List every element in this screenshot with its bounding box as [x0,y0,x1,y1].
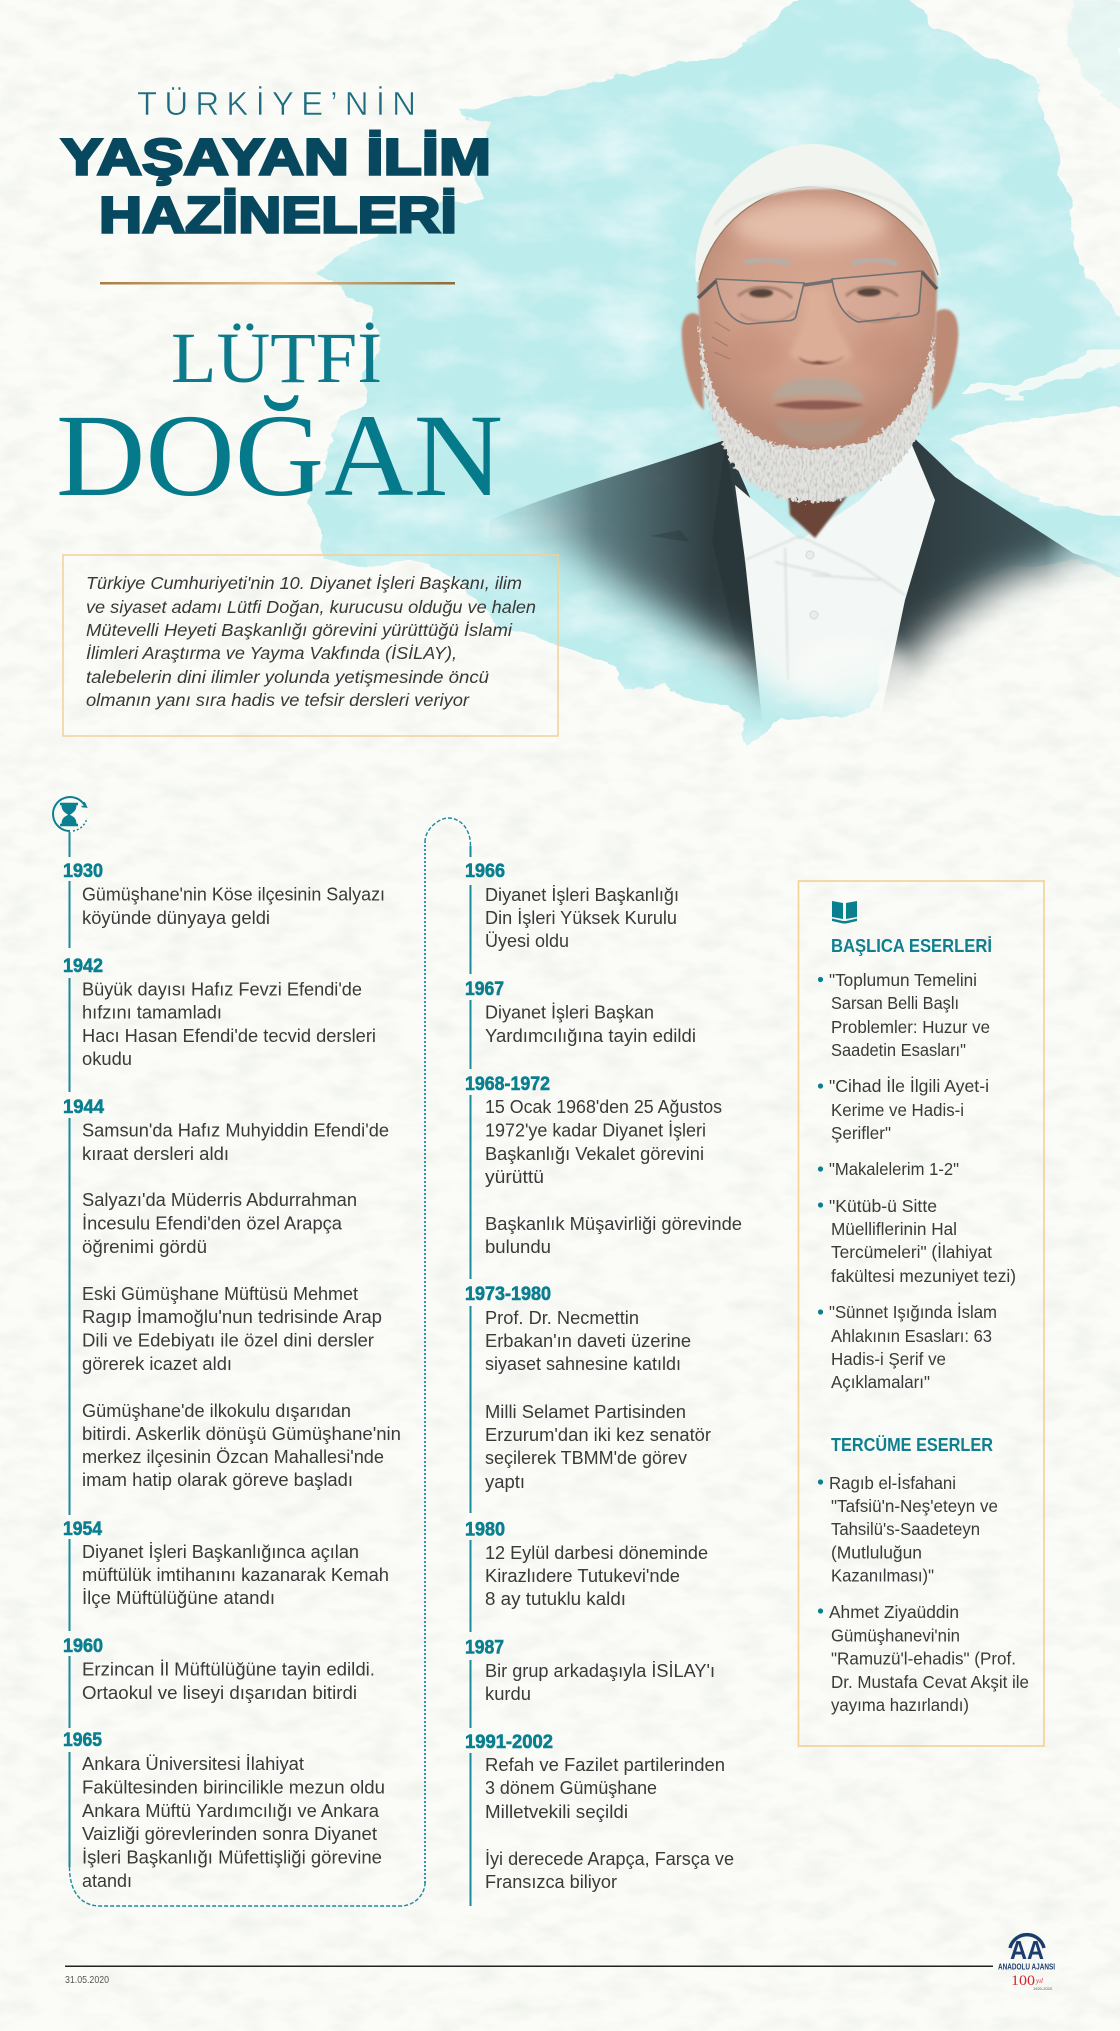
footer rule [65,1966,993,1967]
translated works list: Ragıb el-İsfahani [829,1473,956,1493]
event 1965: Fakültesinden birincilikle mezun oldu [82,1778,385,1798]
event 1967: 1967 [465,978,504,1000]
translated works list: yayıma hazırlandı) [831,1695,969,1715]
event 1965 [63,1729,385,1891]
event 1968-1972: bulundu [485,1237,551,1257]
date: 31.05.2020 [65,1974,109,1986]
main works list: Hadis-i Şerif ve [831,1349,946,1369]
event 1973-1980 [465,1283,711,1492]
event 1954: Diyanet İşleri Başkanlığınca açılan [82,1542,359,1562]
event 1973-1980: Prof. Dr. Necmettin [485,1308,639,1328]
translated works list: (Mutluluğun [831,1542,922,1562]
main works list: "Sünnet Işığında İslam [829,1302,997,1322]
eyebrows [745,259,897,265]
event 1944: görerek icazet aldı [82,1354,232,1374]
white watercolor cloud at portrait edge [790,636,910,704]
intro panel: olmanın yanı sıra hadis ve tefsir dersleri veriyor [86,690,470,710]
event 1966: Din İşleri Yüksek Kurulu [485,908,677,928]
logo: Anadolu Ajansı [998,1935,1055,1991]
intro panel: ve siyaset adamı Lütfi Doğan, kurucusu olduğu ve halen [86,597,536,617]
eyes [712,287,900,359]
event 1942: Büyük dayısı Hafız Fevzi Efendi'de [82,980,362,1000]
translated works list: Tahsilü's-Saadeteyn [831,1519,980,1539]
event 1942: 1942 [63,955,103,977]
event 1944: Gümüşhane'de ilkokulu dışarıdan [82,1401,351,1421]
event 1954: müftülük imtihanını kazanarak Kemah [82,1565,389,1585]
beard [699,320,934,502]
portrait of Lütfi Doğan [470,144,1120,720]
intro panel: Türkiye Cumhuriyeti'nin 10. Diyanet İşleri Başkanı, ilim [86,573,522,593]
main works list: "Makalelerim 1-2" [829,1159,959,1179]
event 1965: Vaizliği görevlerinden sonra Diyanet [82,1824,377,1844]
gold divider [100,282,455,284]
event 1991-2002: 3 dönem Gümüşhane [485,1778,657,1798]
event 1991-2002: İyi derecede Arapça, Farsça ve [485,1849,734,1869]
main works list: Problemler: Huzur ve [831,1017,990,1037]
translated works list: Kazanılması)" [831,1566,934,1586]
translated works list: Gümüşhanevi'nin [831,1626,960,1646]
event 1967 [465,978,696,1046]
event 1944: Ragıp İmamoğlu'nun tedrisinde Arap [82,1307,382,1327]
event 1954: İlçe Müftülüğüne atandı [82,1588,275,1608]
logo: Anadolu Ajansı: ANADOLU AJANSI [998,1962,1055,1972]
event 1966: Üyesi oldu [485,931,569,951]
event 1973-1980: Milli Selamet Partisinden [485,1402,686,1422]
face [696,188,938,450]
event 1991-2002: Refah ve Fazilet partilerinden [485,1755,725,1775]
logo: Anadolu Ajansı: 1920-2020 [1033,1986,1053,1991]
event 1987: 1987 [465,1636,504,1658]
collar folds [745,536,905,680]
chin stubble [779,420,861,444]
event 1991-2002: Fransızca biliyor [485,1872,617,1892]
main works list: Sarsan Belli Başlı [831,993,959,1013]
event 1960: Erzincan İl Müftülüğüne tayin edildi. [82,1660,375,1680]
event 1944: Eski Gümüşhane Müftüsü Mehmet [82,1284,358,1304]
event 1942: hıfzını tamamladı [82,1003,222,1023]
translated works list: Dr. Mustafa Cevat Akşit ile [831,1672,1029,1692]
event 1944: merkez ilçesinin Özcan Mahallesi'nde [82,1447,384,1467]
main works list: fakültesi mezuniyet tezi) [831,1266,1016,1286]
event 1987 [465,1636,715,1704]
event 1968-1972: yürüttü [485,1167,544,1187]
event 1954 [63,1518,389,1608]
event 1960: Ortaokul ve liseyi dışarıdan bitirdi [82,1683,357,1703]
event 1965: Ankara Üniversitesi İlahiyat [82,1754,304,1774]
event 1965: Ankara Müftü Yardımcılığı ve Ankara [82,1801,380,1821]
event 1965: atandı [82,1871,132,1891]
event 1944: öğrenimi gördü [82,1237,207,1257]
logo: Anadolu Ajansı: AA [1010,1935,1044,1965]
event 1930: Gümüşhane'nin Köse ilçesinin Salyazı [82,884,385,904]
taqiyah cap [695,144,941,282]
event 1980 [465,1518,708,1609]
main works list [818,970,1016,1392]
intro panel: talebelerin dini ilimler yolunda yetişmesinde öncü [86,667,489,687]
main works list: Şerifler" [831,1123,891,1143]
event 1942: okudu [82,1049,132,1069]
heading: Türkiye'nin: TÜRKİYE’NİN [137,85,416,122]
event 1973-1980: Erzurum'dan iki kez senatör [485,1425,711,1445]
icon: open book [832,901,857,924]
event 1991-2002: Milletvekili seçildi [485,1802,628,1822]
event 1944: Samsun'da Hafız Muhyiddin Efendi'de [82,1120,389,1140]
heading: translated works: TERCÜME ESERLER [831,1435,993,1455]
logo: Anadolu Ajansı: 100 [1011,1973,1035,1989]
timeline right column [465,860,742,1892]
timeline left column [63,860,401,1891]
event 1960: 1960 [63,1635,103,1657]
logo: Anadolu Ajansı: yıl [1035,1977,1043,1985]
event 1973-1980: siyaset sahnesine katıldı [485,1354,681,1374]
intro panel: Mütevelli Heyeti Başkanlığı görevini yürüttüğü İslami [86,620,513,640]
event 1980: 1980 [465,1518,505,1540]
event 1987: Bir grup arkadaşıyla İSİLAY'ı [485,1661,715,1681]
event 1973-1980: yaptı [485,1472,525,1492]
event 1973-1980: 1973-1980 [465,1283,551,1305]
event 1965: 1965 [63,1729,102,1751]
event 1980: 12 Eylül darbesi döneminde [485,1543,708,1563]
event 1944: Salyazı'da Müderris Abdurrahman [82,1190,357,1210]
event 1930: köyünde dünyaya geldi [82,908,270,928]
translated works list: "Ramuzü'l-ehadis" (Prof. [831,1648,1016,1668]
icon: hourglass [53,797,87,831]
event 1930 [63,860,385,928]
neck shadow [788,490,848,538]
event 1942 [63,955,376,1069]
jacket lapel shadow [652,530,689,542]
event 1944: 1944 [63,1096,104,1118]
main works list: Kerime ve Hadis-i [831,1100,964,1120]
event 1968-1972: 1972'ye kadar Diyanet İşleri [485,1120,706,1140]
main works list: Açıklamaları" [831,1372,930,1392]
event 1966: 1966 [465,860,505,882]
event 1967: Yardımcılığına tayin edildi [485,1026,696,1046]
main works list: Müelliflerinin Hal [831,1219,957,1239]
name: Lütfi: LÜTFİ [171,318,382,398]
forehead highlight [732,201,888,249]
jacket right [884,440,1113,706]
event 1980: 8 ay tutuklu kaldı [485,1589,626,1609]
event 1968-1972: Başkanlığı Vekalet görevini [485,1144,704,1164]
heading: Hazineleri: HAZİNELERİ [99,187,457,244]
main works list: Saadetin Esasları" [831,1040,966,1060]
main works list: "Kütüb-ü Sitte [829,1196,937,1216]
moustache [772,378,866,402]
main works list: Ahlakının Esasları: 63 [831,1326,992,1346]
event 1944: Dili ve Edebiyatı ile özel dini dersler [82,1330,374,1350]
event 1944 [63,1096,401,1490]
main works list: "Cihad İle İlgili Ayet-i [829,1076,989,1096]
event 1966 [465,860,679,951]
event 1968-1972 [465,1073,742,1257]
lips [774,400,864,410]
event 1968-1972: 1968-1972 [465,1073,550,1095]
timeline connector lines [70,818,470,1906]
cheek shadow [734,331,904,368]
event 1966: Diyanet İşleri Başkanlığı [485,885,679,905]
glasses [698,271,937,324]
event 1991-2002 [465,1731,734,1892]
watercolor blob [314,0,1120,745]
event 1954: 1954 [63,1518,102,1540]
heading: main works: BAŞLICA ESERLERİ [831,936,992,956]
event 1968-1972: Başkanlık Müşavirliği görevinde [485,1214,742,1234]
event 1944: kıraat dersleri aldı [82,1144,229,1164]
panel: works [798,881,1044,1746]
event 1930: 1930 [63,860,103,882]
ears [682,309,958,410]
event 1967: Diyanet İşleri Başkan [485,1002,654,1022]
shirt [735,445,935,720]
translated works list: Ahmet Ziyaüddin [829,1602,959,1622]
jacket left [491,440,761,714]
main works list: "Toplumun Temelini [829,970,977,990]
translated works list [818,1473,1029,1715]
event 1944: bitirdi. Askerlik dönüşü Gümüşhane'nin [82,1424,401,1444]
event 1991-2002: 1991-2002 [465,1731,553,1753]
intro panel [63,555,558,736]
main works list: Tercümeleri" (İlahiyat [831,1242,992,1262]
event 1973-1980: seçilerek TBMM'de görev [485,1448,687,1468]
event 1960 [63,1635,375,1703]
event 1968-1972: 15 Ocak 1968'den 25 Ağustos [485,1097,722,1117]
name: Doğan: DOĞAN [56,390,503,521]
event 1980: Kirazlıdere Tutukevi'nde [485,1566,680,1586]
event 1987: kurdu [485,1684,531,1704]
shirt buttons [806,551,818,619]
event 1942: Hacı Hasan Efendi'de tecvid dersleri [82,1026,376,1046]
intro panel: İlimleri Araştırma ve Yayma Vakfında (İSİLAY), [86,643,457,663]
nose [791,317,850,366]
event 1965: İşleri Başkanlığı Müfettişliği görevine [82,1848,382,1868]
translated works list: "Tafsiü'n-Neş'eteyn ve [831,1496,998,1516]
event 1973-1980: Erbakan'ın daveti üzerine [485,1331,691,1351]
event 1944: imam hatip olarak göreve başladı [82,1470,353,1490]
event 1944: İncesulu Efendi'den özel Arapça [82,1214,343,1234]
heading: Yaşayan İlim: YAŞAYAN İLİM [61,128,491,186]
